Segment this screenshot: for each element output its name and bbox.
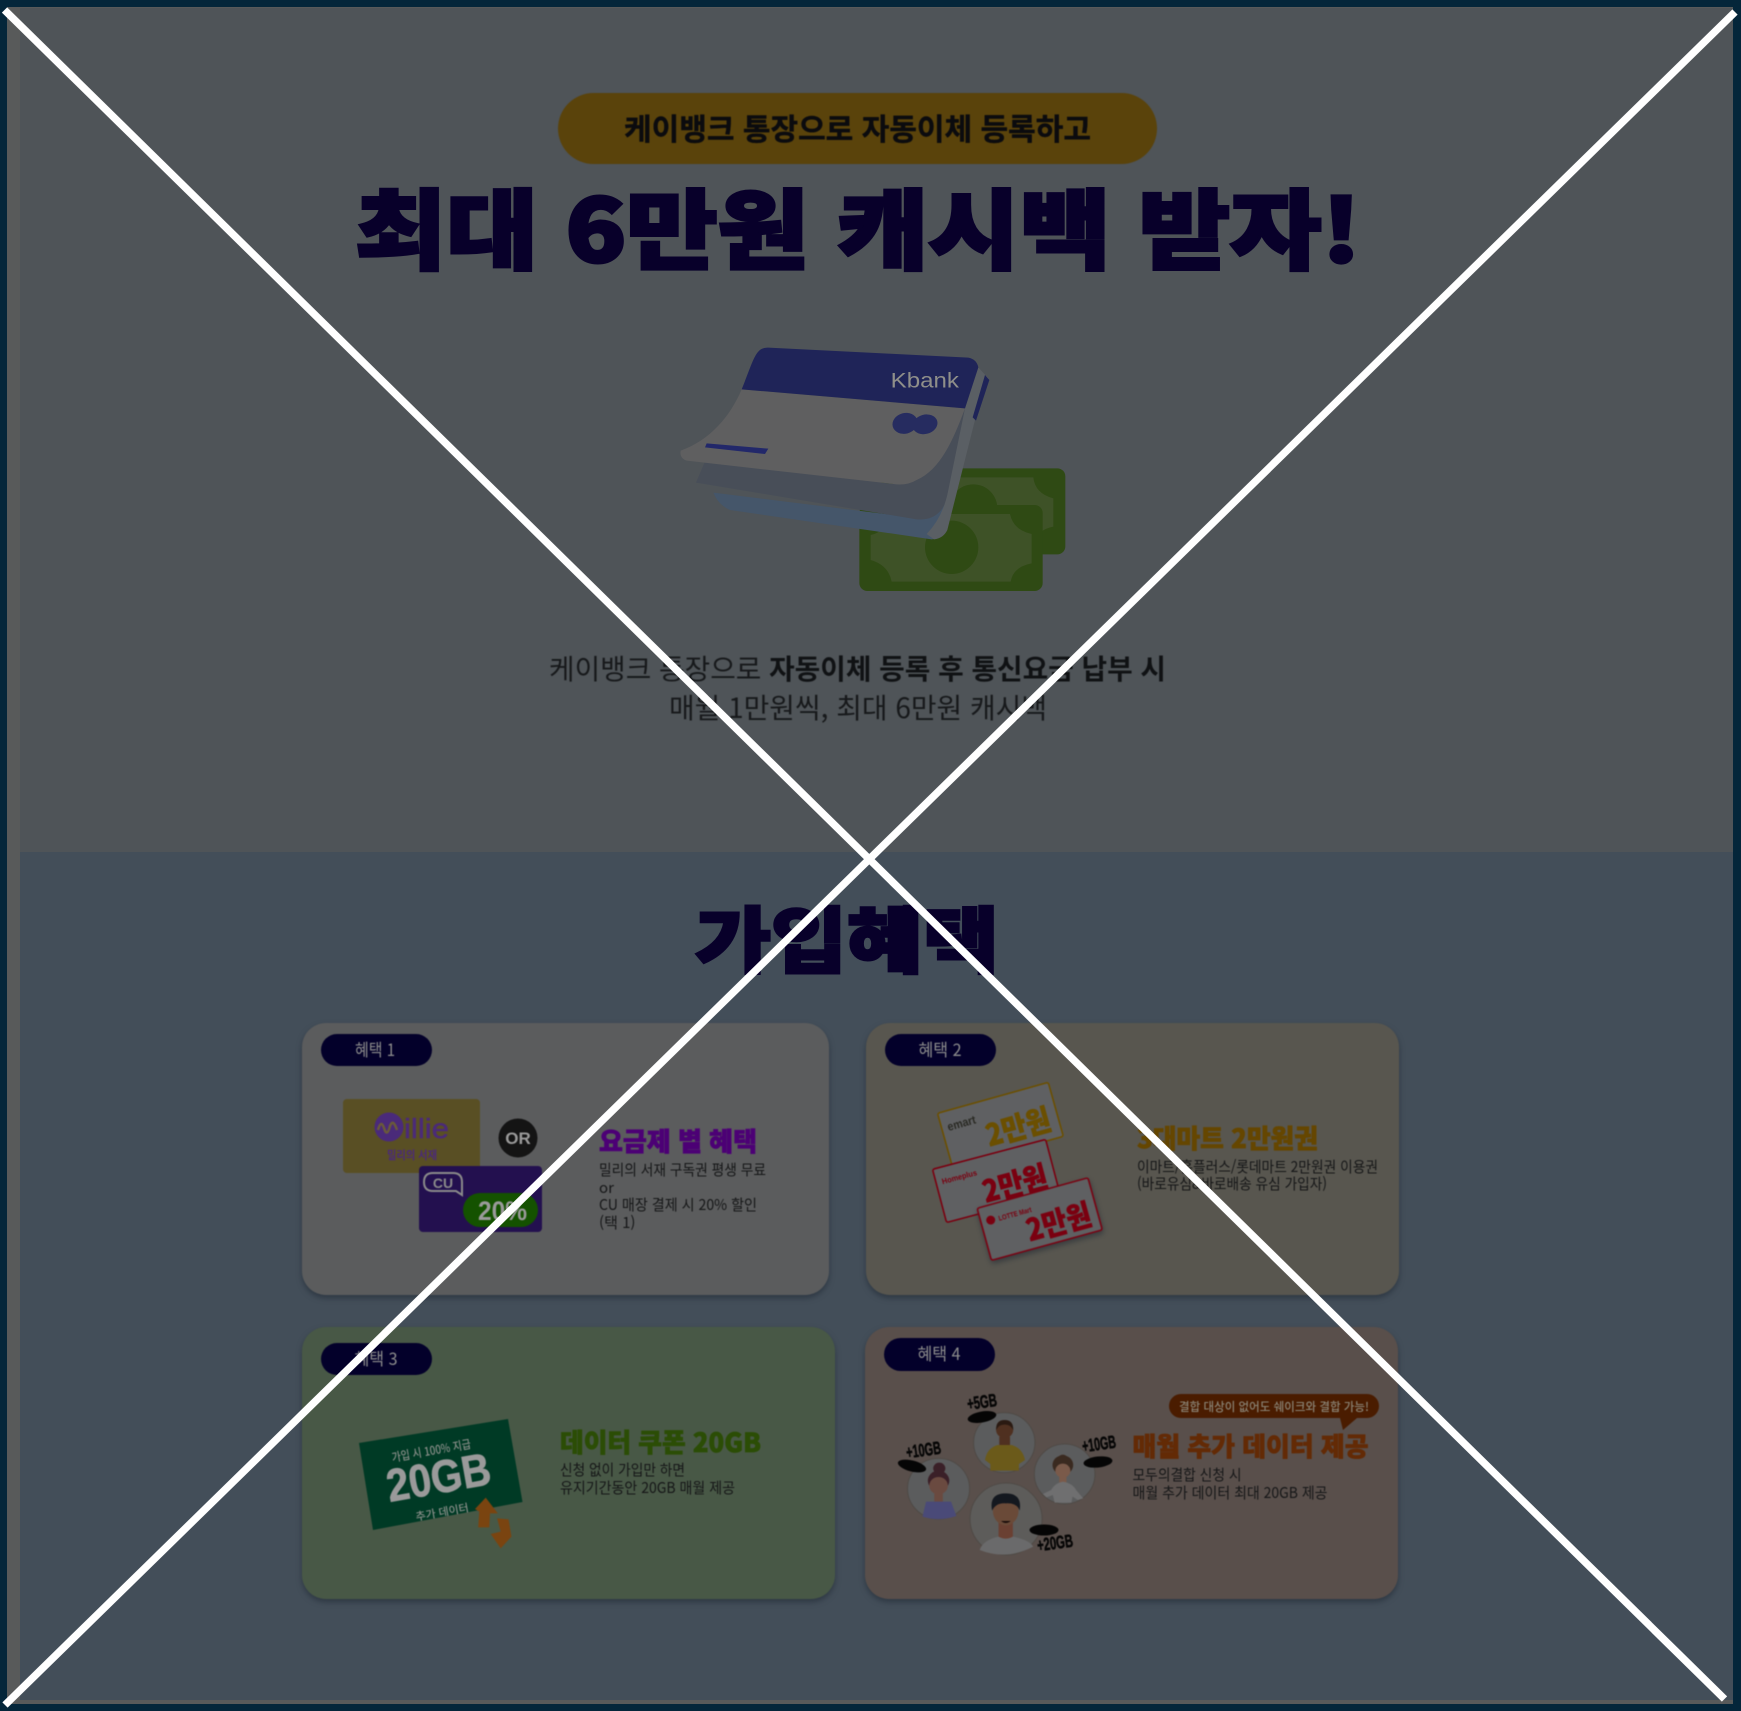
card text: extra data xyxy=(1132,1427,1368,1503)
icon: Lotte Mart coupon xyxy=(977,1178,1103,1261)
card text: data coupon: 신청 없이 가입만 하면 xyxy=(560,1459,685,1480)
title: 최대 6만원 캐시백 받자! xyxy=(355,162,1361,288)
card text: plan perks: (택 1) xyxy=(599,1212,635,1233)
card text: mart vouchers: (바로유심&바로배송 유심 가입자) xyxy=(1137,1173,1327,1194)
icon: CU 20% voucher: 20% xyxy=(478,1196,527,1226)
data labels: +5GB xyxy=(966,1390,998,1414)
panel: cashback hero xyxy=(20,8,1733,852)
card: benefit 1 plan perks xyxy=(302,1023,829,1295)
icon: CU 20% voucher xyxy=(419,1166,542,1232)
card: benefit 2 mart vouchers xyxy=(866,1023,1399,1295)
card: benefit 3 data coupon xyxy=(302,1327,835,1599)
badge: benefit 4: 혜택 4 xyxy=(918,1340,960,1365)
data labels: +10GB xyxy=(1081,1432,1117,1456)
icon: Homeplus coupon xyxy=(932,1139,1060,1222)
icon: Homeplus coupon: Homeplus xyxy=(941,1168,978,1186)
icon: OR badge xyxy=(498,1118,538,1158)
description text: 매월 1만원씩, 최대 6만원 캐시백 xyxy=(669,687,1047,727)
section heading: 가입혜택 xyxy=(695,883,999,988)
icon: Kbank passbook and cash: Kbank xyxy=(891,368,959,392)
description text xyxy=(549,648,1166,727)
card text: extra data: 모두의결합 신청 시 xyxy=(1132,1464,1242,1485)
badge: benefit 1: 혜택 1 xyxy=(355,1036,395,1061)
icon: OR badge: OR xyxy=(505,1129,531,1148)
icon: Kbank passbook and cash xyxy=(680,348,1065,591)
description text: 케이뱅크 통장으로 자동이체 등록 후 통신요금 납부 시 xyxy=(549,648,1166,688)
data labels xyxy=(897,1390,1117,1555)
card text: data coupon: 데이터 쿠폰 20GB xyxy=(560,1423,761,1460)
icon: 20GB data ticket: 추가 데이터 xyxy=(414,1499,470,1525)
card text: plan perks xyxy=(599,1122,766,1233)
card text: mart vouchers xyxy=(1137,1119,1378,1194)
icon: 20GB data ticket xyxy=(359,1419,522,1548)
badge: benefit 1 xyxy=(321,1034,432,1066)
card text: data coupon xyxy=(560,1423,761,1498)
badge: benefit 2: 혜택 2 xyxy=(918,1036,962,1061)
card text: mart vouchers: 이마트/홈플러스/롯데마트 2만원권 이용권 xyxy=(1137,1156,1378,1177)
callout: shake bundling: 결합 대상이 없어도 쉐이크와 결합 가능! xyxy=(1179,1398,1369,1415)
card text: extra data: 매월 추가 데이터 최대 20GB 제공 xyxy=(1132,1482,1328,1503)
icon: Lotte Mart coupon: LOTTE Mart xyxy=(998,1207,1033,1223)
data labels: +20GB xyxy=(1036,1531,1074,1555)
badge: benefit 2 xyxy=(885,1034,996,1066)
icon: Homeplus coupon: 2만원 xyxy=(977,1152,1052,1211)
icon: 20GB data ticket: 20GB xyxy=(382,1442,495,1512)
icon: 20GB data ticket: 가입 시 100% 지급 xyxy=(390,1435,472,1466)
badge: benefit 3: 혜택 3 xyxy=(354,1345,398,1370)
icon: emart coupon: emart xyxy=(946,1113,977,1134)
icon: emart coupon xyxy=(938,1082,1063,1167)
icon: family data avatars xyxy=(907,1413,1095,1555)
card text: plan perks: 요금제 별 혜택 xyxy=(599,1122,757,1159)
icon: Willie voucher xyxy=(343,1099,480,1173)
icon: Willie voucher: 밀리의 서재 xyxy=(387,1147,437,1163)
card text: plan perks: or xyxy=(599,1177,614,1198)
subtitle pill: 케이뱅크 통장으로 자동이체 등록하고 xyxy=(624,105,1091,149)
panel: membership benefits xyxy=(20,852,1733,1700)
subtitle pill xyxy=(558,93,1157,164)
card text: mart vouchers: 3대마트 2만원권 xyxy=(1137,1119,1318,1156)
card text: data coupon: 유지기간동안 20GB 매월 제공 xyxy=(560,1477,735,1498)
card text: plan perks: CU 매장 결제 시 20% 할인 xyxy=(599,1194,757,1215)
icon: emart coupon: 2만원 xyxy=(980,1095,1055,1155)
callout: shake bundling xyxy=(1169,1394,1379,1430)
icon: CU 20% voucher: CU xyxy=(433,1175,453,1191)
card text: plan perks: 밀리의 서재 구독권 평생 무료 xyxy=(599,1159,766,1180)
icon: Lotte Mart coupon: 2만원 xyxy=(1021,1190,1096,1250)
card text: extra data: 매월 추가 데이터 제공 xyxy=(1132,1427,1368,1464)
data labels: +10GB xyxy=(905,1438,942,1462)
icon: Willie voucher: illie xyxy=(404,1113,449,1144)
badge: benefit 4 xyxy=(884,1338,995,1371)
card: benefit 4 monthly extra data xyxy=(865,1327,1398,1599)
badge: benefit 3 xyxy=(321,1343,432,1375)
